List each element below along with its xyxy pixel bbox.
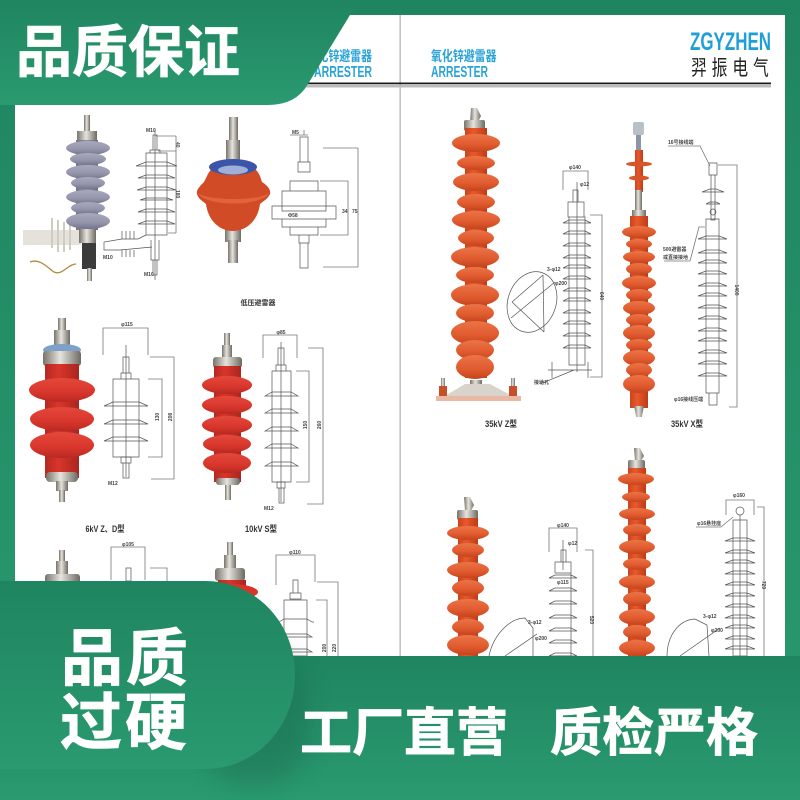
white catalogue sheet — [15, 15, 785, 656]
arrester photo: partial lower middle — [204, 542, 258, 605]
arrester photo: 10kV red — [202, 333, 252, 500]
dimension drawing: 35kV X: 1400 — [733, 284, 739, 296]
dimension drawing: lower left column: 520 — [588, 616, 594, 624]
dimension drawing: lower left column: 3-φ12 — [528, 620, 542, 626]
dimension drawing: low voltage arrester: Φ58 — [288, 213, 298, 219]
caption: 35kV X: 35kV X型 — [671, 418, 703, 429]
panel: bottom-left pill — [0, 581, 295, 769]
dimension drawing: 35kV Z: 3-φ12 — [547, 267, 561, 273]
dimension drawing: 35kV Z — [499, 165, 604, 386]
dimension drawing: partial lower left — [111, 542, 167, 581]
brand logo — [690, 28, 774, 80]
slogan: 工厂直营 质检严格: 质检严格 — [550, 705, 758, 763]
dimension drawing: grey polymer arrester: M10 — [144, 272, 154, 278]
arrester photo: 35kV X — [622, 122, 656, 417]
dimension drawing: 6kV arrester: 130 — [155, 413, 161, 421]
dimension drawing: low voltage arrester: 34 — [342, 209, 348, 215]
dimension drawing: 35kV Z: φ140 — [569, 165, 581, 171]
panel shadow — [200, 650, 310, 785]
dimension drawing: lower right column — [667, 493, 766, 656]
arrester photo: 35kV Z — [436, 108, 521, 401]
dimension drawing: partial lower middle — [276, 550, 338, 656]
dimension drawing: 10kV arrester: 150 — [303, 421, 309, 429]
dimension drawing: lower left column: φ200 — [535, 636, 547, 642]
header rule — [305, 82, 771, 88]
dimension drawing: 6kV arrester — [103, 322, 174, 487]
dimension drawing: 35kV X: φ16接线压端 — [674, 396, 703, 403]
right page header: product name: 氧化锌避雷器 — [431, 48, 497, 64]
dimension drawing: 10kV arrester: 260 — [317, 421, 323, 429]
slogan: 工厂直营 质检严格: 工厂直营 — [300, 705, 508, 763]
left page header: product name: 氧化锌避雷器 — [307, 48, 372, 64]
dimension drawing: lower left column: φ12 — [568, 541, 577, 547]
dimension drawing: 10kV arrester: φ85 — [276, 330, 286, 336]
dimension drawing: 35kV X: 或直接接地 — [663, 254, 688, 261]
caption: 10kV: 10kV S型 — [245, 523, 277, 534]
dimension drawing: grey polymer arrester — [103, 128, 180, 280]
slogan: 工厂直营 质检严格 — [300, 705, 758, 763]
dimension drawing: 35kV Z: φ12 — [580, 182, 589, 188]
slogan: 品质过硬 — [60, 625, 191, 758]
dimension drawing: lower right column: φ16悬挂座 — [697, 520, 721, 527]
dimension drawing: 35kV Z: 接地孔 — [534, 379, 549, 386]
arrester photo: lower right column — [618, 448, 655, 658]
dimension drawing: partial lower middle: φ110 — [289, 550, 301, 556]
dimension drawing: lower right column: φ160 — [733, 493, 745, 499]
dimension drawing: partial lower left: φ105 — [122, 542, 134, 548]
dimension drawing: 35kV X: 16号接线端 — [668, 139, 694, 146]
dimension drawing: partial lower middle: 220 — [332, 644, 338, 652]
top banner — [0, 0, 362, 105]
dimension drawing: lower left column — [489, 523, 594, 656]
slogan: 品质过硬: 过硬 — [60, 689, 190, 758]
dimension drawing: 6kV arrester: M12 — [108, 481, 118, 487]
dimension drawing: low voltage arrester: 75 — [352, 209, 358, 215]
heading: 品质保证: 品质保证 — [16, 21, 240, 84]
dimension drawing: grey polymer arrester: M10 — [103, 255, 113, 261]
arrester photo: grey polymer — [23, 115, 110, 281]
dimension drawing: 35kV Z: φ200 — [555, 281, 567, 287]
dimension drawing: 35kV X: 500避雷器 — [663, 246, 686, 253]
dimension drawing: lower right column: φ200 — [711, 628, 723, 634]
dimension drawing: low voltage arrester — [272, 130, 358, 268]
right page header: product name: ARRESTER — [431, 64, 488, 81]
right page header: product name — [431, 48, 497, 81]
arrester photo: lower left column — [447, 497, 489, 658]
dimension drawing: 35kV X — [663, 139, 739, 407]
caption: 35kV Z: 35kV Z型 — [485, 418, 517, 429]
dimension drawing: low voltage arrester: M5 — [292, 130, 299, 136]
dimension drawing: 35kV Z: 640 — [598, 292, 604, 300]
brand logo: 羿振电气 — [691, 56, 774, 80]
arrester photo: red round low voltage — [197, 117, 270, 263]
dimension drawing: lower left column: φ140 — [557, 523, 569, 529]
left page header: product name — [307, 48, 372, 81]
dimension drawing: lower right column: 3-φ12 — [703, 614, 717, 620]
dimension drawing: partial lower middle: 200 — [322, 644, 328, 652]
bottom green band — [0, 656, 800, 800]
dimension drawing: grey polymer arrester: 180 — [174, 190, 180, 199]
dimension drawing: grey polymer arrester: 40 — [174, 142, 180, 148]
top band — [362, 0, 800, 15]
arrester photo: 6kV red — [29, 318, 95, 502]
dimension drawing: lower right column: 720 — [760, 581, 766, 589]
dimension drawing: 6kV arrester: φ115 — [121, 322, 133, 328]
caption: 6kV: 6kV Z、D型 — [86, 523, 124, 534]
dimension drawing: grey polymer arrester: M10 — [146, 128, 156, 134]
dimension drawing: 6kV arrester: 208 — [168, 413, 174, 421]
dimension drawing: lower left column: φ115 — [557, 580, 569, 586]
dimension drawing: 10kV arrester: M12 — [264, 506, 274, 512]
slogan: 品质过硬: 品质 — [61, 625, 191, 694]
arrester photo: partial lower left — [45, 550, 80, 584]
dimension drawing: 10kV arrester — [263, 330, 323, 512]
left page header: product name: ARRESTER — [314, 64, 372, 81]
caption: low voltage arrester: 低压避雷器 — [240, 298, 276, 307]
